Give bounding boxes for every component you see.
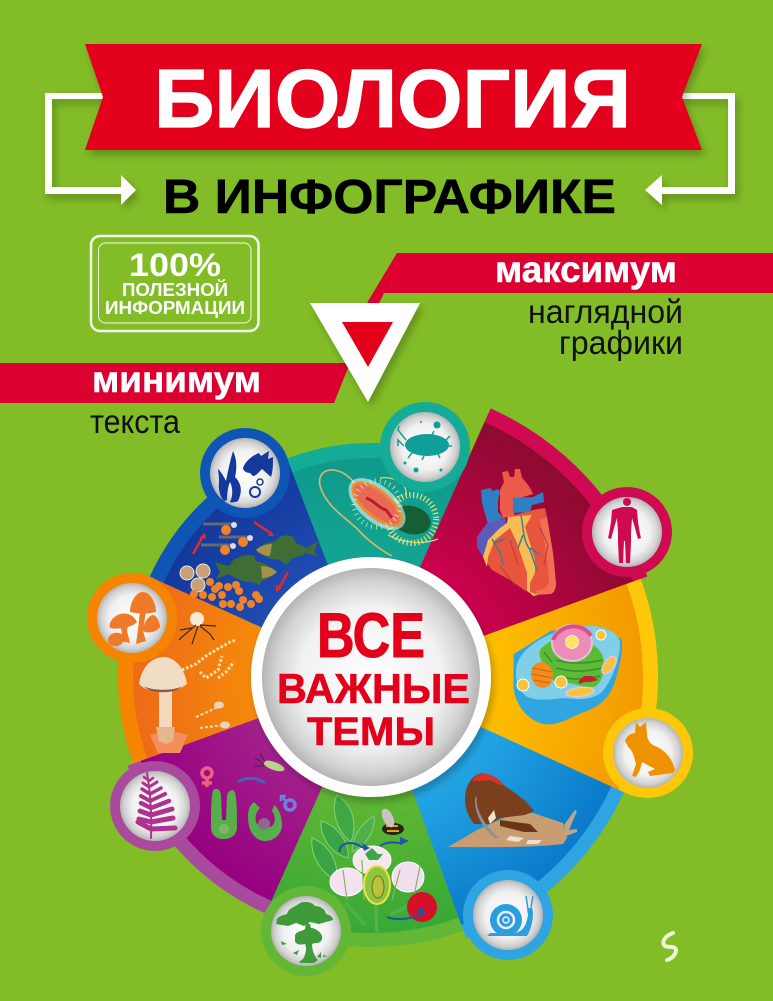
triangle marker: [310, 303, 420, 402]
illustration: snail: [448, 773, 577, 847]
text: of text: текста: [90, 403, 181, 440]
icon: fish and seaweed: [200, 428, 290, 518]
badge: 100% useful information: [91, 236, 258, 331]
icon: snail: [463, 870, 553, 960]
sector: molluscs: [371, 677, 624, 938]
central disc: all important topics: [251, 557, 491, 797]
ribbon: minimum: минимум: [92, 359, 261, 400]
icon: rabbit: [603, 708, 693, 798]
text: visual graphics: графики: [559, 324, 683, 361]
icon: fern: [110, 761, 200, 851]
badge: 100% useful information: ИНФОРМАЦИИ: [105, 298, 245, 318]
sector: cell biology: [371, 579, 658, 796]
text: visual graphics: наглядной: [528, 293, 683, 330]
sector: ferns and mosses: [128, 677, 371, 914]
illustration: flower: [312, 795, 437, 932]
text: visual graphics: [528, 293, 683, 361]
illustration: mushroom life cycle: [139, 612, 236, 753]
badge: 100% useful information: 100%: [129, 247, 221, 283]
illustration: heart: [477, 469, 556, 596]
publisher logo: [663, 933, 676, 960]
topic wheel: [118, 408, 658, 947]
title text: БИОЛОГИЯ: [154, 52, 631, 145]
illustration: fish life cycle: [180, 522, 319, 611]
icon: mushrooms: [87, 573, 177, 663]
arrow: left loop: [45, 93, 136, 205]
arrow: right loop: [645, 93, 735, 205]
ribbon: maximum: [358, 249, 773, 318]
badge: 100% useful information: ПОЛЕЗНОЙ: [122, 279, 228, 300]
central disc: all important topics: ТЕМЫ: [307, 710, 435, 754]
central disc: all important topics: ВСЕ: [317, 601, 425, 671]
sector: fungi: [118, 572, 371, 764]
ribbon: minimum: [0, 359, 350, 403]
sector: plants: [261, 677, 463, 947]
ribbon: maximum: максимум: [495, 249, 677, 290]
subtitle: В ИНФОГРАФИКЕ: [163, 171, 616, 224]
title banner: [85, 44, 702, 150]
sector: bacteria: [287, 443, 466, 677]
illustration: archegonium and antheridium: [202, 753, 295, 841]
sector: fish: [150, 450, 371, 677]
illustration: bacteria: [320, 468, 438, 556]
icon: bacterium: [380, 402, 470, 492]
sector: human anatomy: [371, 408, 647, 677]
icon: tree: [261, 886, 351, 976]
icon: human figure: [582, 487, 672, 577]
illustration: cell: [515, 625, 621, 723]
central disc: all important topics: ВАЖНЫЕ: [277, 665, 470, 712]
